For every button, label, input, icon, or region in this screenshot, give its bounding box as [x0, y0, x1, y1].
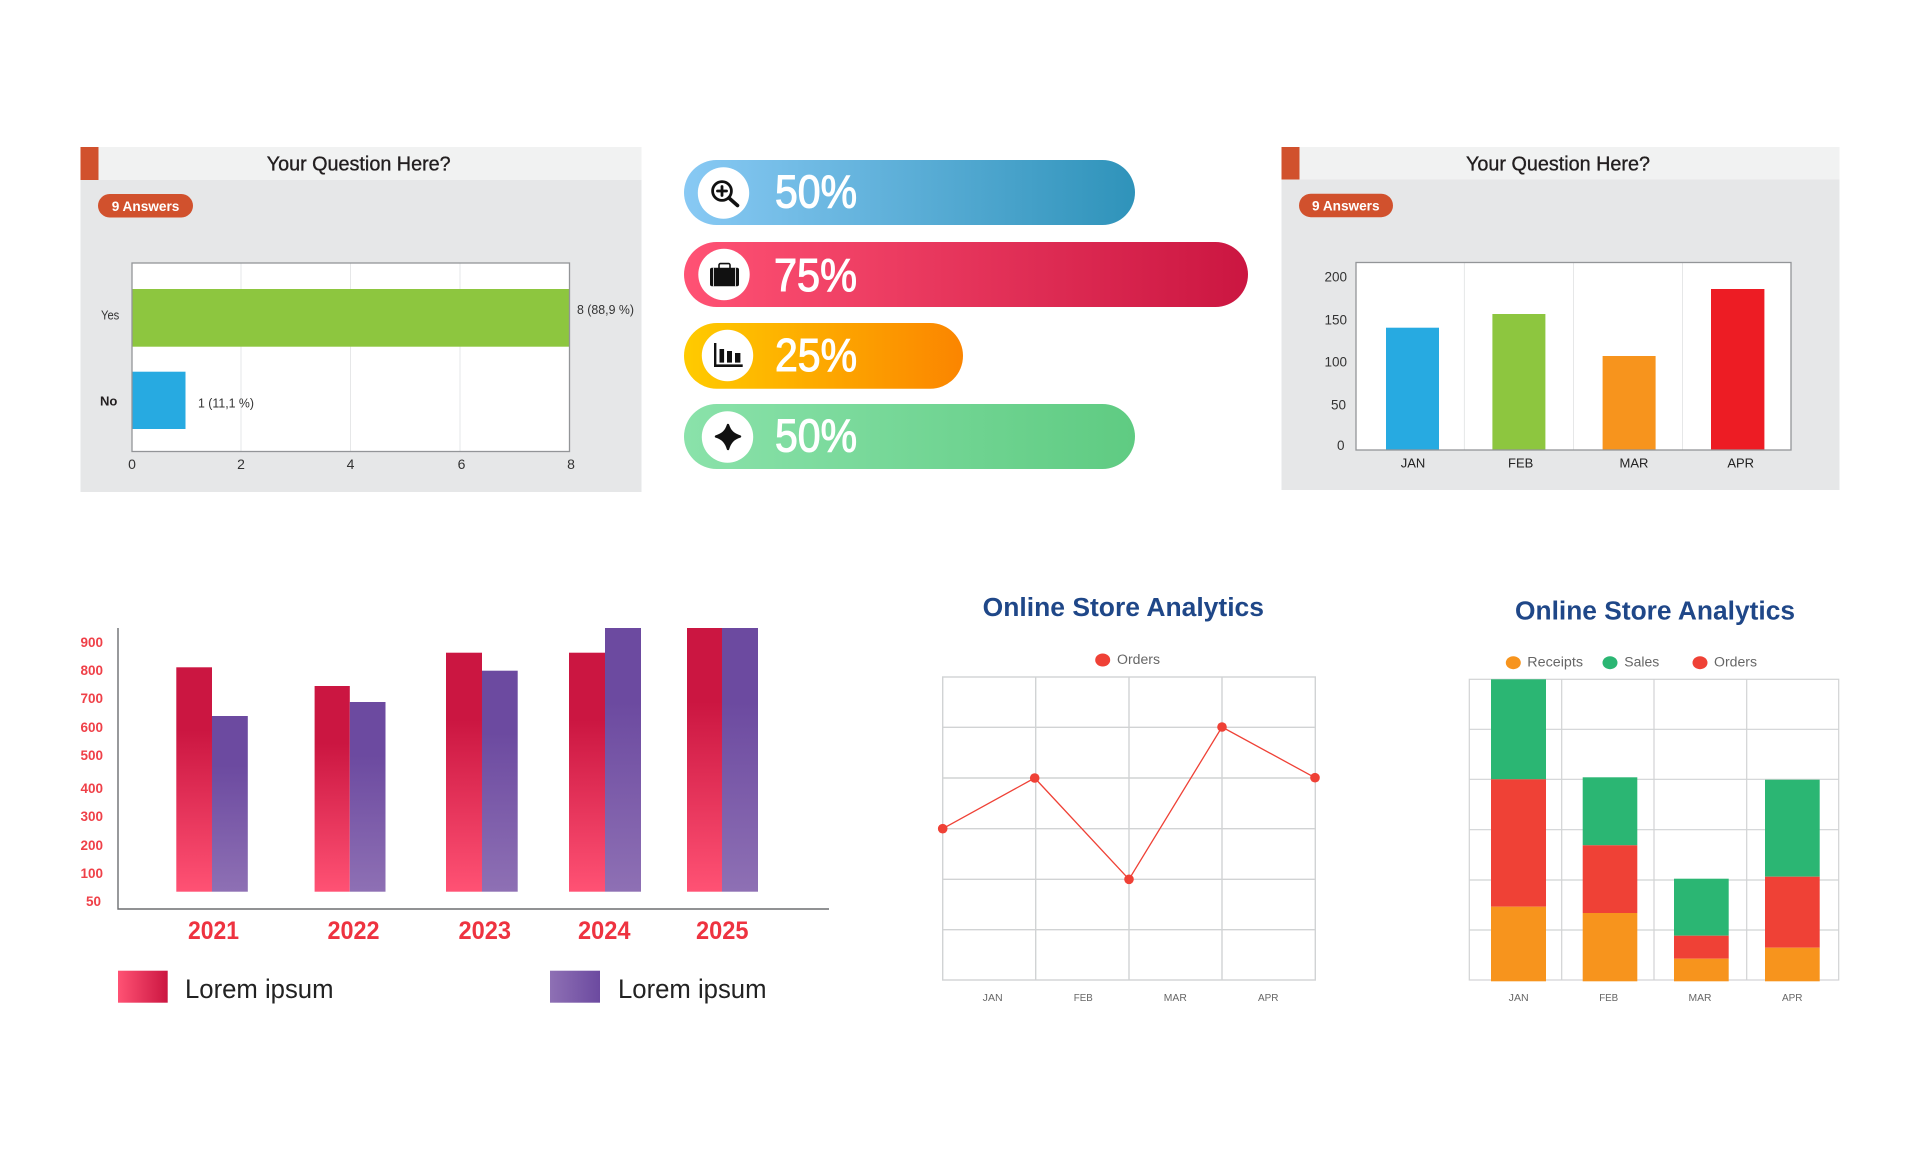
- chart: monthly vertical bars: [1324, 262, 1791, 470]
- chart: yes no horizontal bars: 4: [347, 456, 355, 472]
- y axis labels: 50: [86, 894, 101, 909]
- panel: horizontal bar survey: [80, 147, 642, 492]
- badge: answers count: 9 Answers: [1312, 198, 1380, 214]
- icon: magnifier: [713, 182, 738, 206]
- legend: receipts sales orders: [1506, 655, 1757, 670]
- badge: answers count: [1299, 194, 1393, 217]
- stacked bar: FEB: [1583, 777, 1637, 981]
- y axis labels: 900: [80, 635, 103, 650]
- badge: answers count: [98, 194, 193, 218]
- y axis labels: 800: [80, 663, 103, 678]
- pill: 50 percent blue: 50%: [775, 166, 857, 218]
- x axis month labels: APR: [1782, 993, 1802, 1004]
- legend: orders: Orders: [1117, 652, 1160, 667]
- pill: 25 percent orange: [684, 323, 963, 389]
- chart: monthly vertical bars: 150: [1324, 313, 1347, 328]
- y axis labels: 300: [80, 809, 103, 824]
- x axis month labels: MAR: [1688, 993, 1712, 1004]
- chart grid: [1469, 679, 1839, 980]
- bars: 2025: [687, 628, 758, 892]
- stacked bar: JAN: [1491, 679, 1546, 981]
- x axis month labels: JAN: [1509, 993, 1529, 1004]
- pill: 25 percent orange: 25%: [775, 329, 857, 381]
- bars: 2024: [569, 628, 641, 892]
- x axis month labels: [983, 993, 1278, 1004]
- chart: yes no horizontal bars: Yes: [101, 308, 119, 322]
- x axis year labels: 2025: [696, 917, 749, 945]
- x axis year labels: [188, 917, 749, 945]
- chart: yes no horizontal bars: 8 (88,9 %): [577, 302, 634, 317]
- pill: 50 percent green: 50%: [775, 410, 857, 462]
- bars: 2023: [446, 653, 518, 892]
- x axis year labels: 2023: [458, 917, 511, 945]
- panel: yearly paired bars: [80, 628, 829, 1004]
- x axis year labels: 2024: [578, 917, 631, 945]
- pill: 75 percent red: 75%: [774, 249, 857, 301]
- icon: briefcase: [710, 264, 739, 286]
- chart: monthly vertical bars: 0: [1337, 438, 1344, 453]
- legend: red series: Lorem ipsum: [185, 974, 334, 1004]
- legend: purple series: Lorem ipsum: [618, 974, 766, 1004]
- chart: yes no horizontal bars: 8: [567, 456, 575, 472]
- x axis year labels: 2022: [328, 917, 380, 945]
- chart: yes no horizontal bars: 1 (11,1 %): [198, 396, 254, 410]
- y axis labels: 400: [80, 781, 103, 796]
- panel: online store stacked bars: [1469, 597, 1839, 1004]
- y axis labels: 600: [80, 720, 103, 735]
- legend: orders: [1095, 652, 1160, 667]
- bars: 2021: [176, 667, 248, 892]
- icon: bar chart: [714, 343, 743, 367]
- chart: monthly vertical bars: 100: [1324, 354, 1347, 369]
- chart grid: [943, 677, 1315, 980]
- heading: survey question: Your Question Here?: [267, 154, 451, 176]
- pill: 75 percent red: [684, 242, 1248, 307]
- chart: monthly vertical bars: JAN: [1401, 455, 1425, 470]
- panel: progress pills: [684, 160, 1248, 469]
- chart: yes no horizontal bars: 0: [128, 456, 136, 472]
- legend: red series: [118, 971, 334, 1004]
- heading: analytics title: Online Store Analytics: [1515, 597, 1795, 625]
- chart: monthly vertical bars: MAR: [1620, 455, 1648, 470]
- x axis month labels: MAR: [1164, 993, 1187, 1004]
- chart: monthly vertical bars: APR: [1727, 455, 1754, 470]
- x axis month labels: JAN: [983, 993, 1003, 1004]
- chart: monthly vertical bars: 200: [1324, 270, 1347, 285]
- legend: purple series: [550, 971, 766, 1004]
- y axis labels: 700: [80, 691, 103, 706]
- stacked bar: MAR: [1674, 879, 1729, 981]
- chart: yes no horizontal bars: [100, 263, 634, 472]
- x axis month labels: [1509, 993, 1802, 1004]
- chart axes: [118, 628, 829, 909]
- y axis labels: 200: [80, 838, 103, 853]
- legend: receipts sales orders: Orders: [1714, 655, 1757, 670]
- chart: yes no horizontal bars: No: [100, 393, 117, 408]
- bars: 2022: [315, 686, 386, 892]
- heading: analytics title: Online Store Analytics: [983, 594, 1264, 622]
- panel: monthly bar survey: [1282, 147, 1840, 490]
- y axis labels: [80, 635, 103, 909]
- x axis month labels: APR: [1258, 993, 1278, 1004]
- chart: yes no horizontal bars: 6: [458, 456, 466, 472]
- stacked bar: APR: [1765, 780, 1820, 981]
- x axis year labels: 2021: [188, 917, 239, 945]
- legend: receipts sales orders: Receipts: [1527, 655, 1583, 670]
- pill: 50 percent green: [684, 404, 1135, 469]
- heading: survey question: Your Question Here?: [1466, 154, 1650, 176]
- pill: 50 percent blue: [684, 160, 1135, 225]
- legend: receipts sales orders: Sales: [1624, 655, 1660, 670]
- x axis month labels: FEB: [1599, 993, 1619, 1004]
- chart: yes no horizontal bars: 2: [237, 456, 245, 472]
- line series: orders: [938, 722, 1320, 884]
- chart: monthly vertical bars: 50: [1331, 398, 1346, 413]
- y axis labels: 100: [80, 866, 103, 881]
- badge: answers count: 9 Answers: [112, 198, 180, 214]
- y axis labels: 500: [80, 748, 103, 763]
- x axis month labels: FEB: [1074, 993, 1093, 1004]
- chart: monthly vertical bars: FEB: [1508, 455, 1533, 470]
- icon: four point star: [716, 425, 740, 449]
- panel: online store line chart: [938, 594, 1320, 1004]
